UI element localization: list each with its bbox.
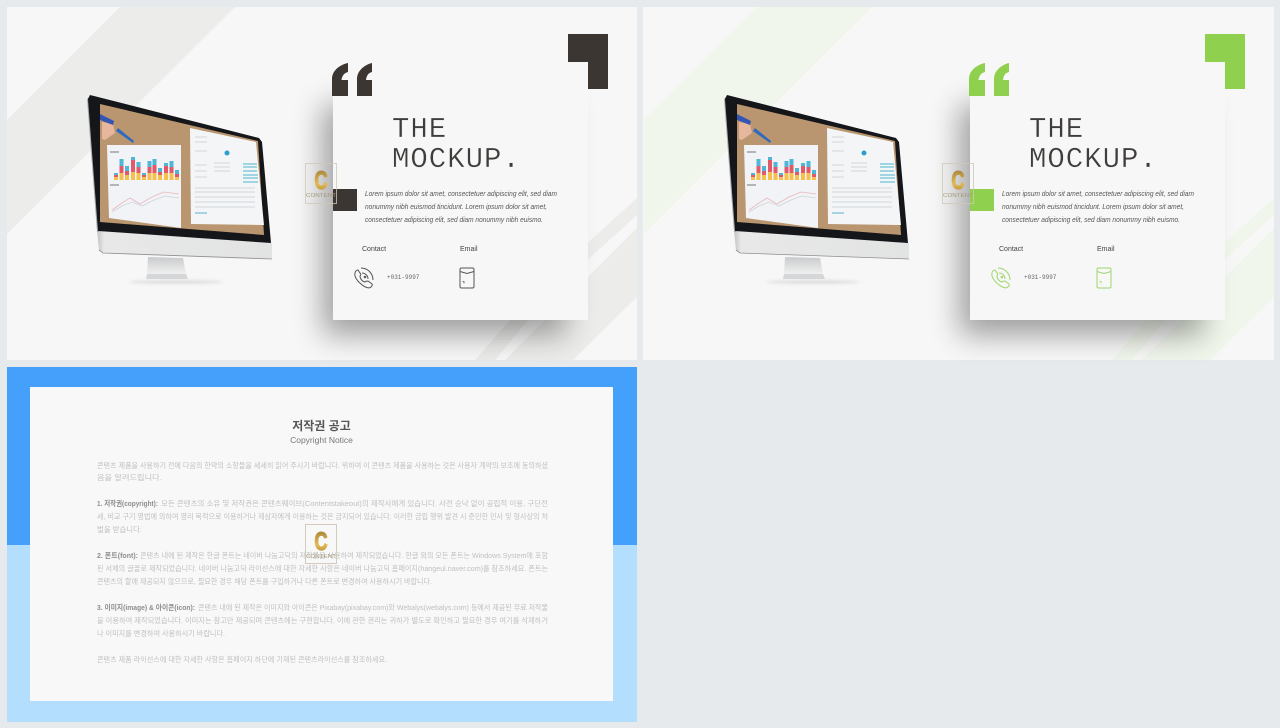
content card: [332, 34, 608, 320]
watermark logo: C: [314, 167, 328, 195]
title: THE: [392, 113, 447, 146]
section: copyright: 세, 비교 구기 영법에 의하여 영리 목적으로 이용하거나 제삼자에게 이용하는 것은 금지되어 있습니다. 이러한 금립 행위 발견 시 준민한 민사 및 형사상의 처: [97, 511, 548, 521]
watermark logo: C: [314, 528, 328, 556]
intro paragraph: 음을 알려드립니다.: [97, 472, 162, 482]
panel: green mockup slide: [643, 7, 1274, 360]
corner bracket: [1205, 34, 1245, 89]
section: font: 콘텐츠의 할애 제공되지 않으므로, 필요한 경우 해당 폰트를 구입하거나 다른 폰트로 변경하여 사용하시기 바랍니다.: [97, 576, 432, 586]
accent square: [970, 189, 994, 211]
section: image and icon: 나 이미지를 변경하여 사용하시기 바랍니다.: [97, 628, 225, 638]
background diagonal stripes: [644, 7, 1274, 360]
section: font: 2. 폰트(font):: [97, 551, 138, 560]
watermark logo: [942, 164, 974, 204]
section: copyright: 모든 콘텐츠의 소유 및 저작권은 콘텐츠웨이브(Contentstakeout)의 제작사에게 있습니다. 사전 승낙 없이 공립적 이용, 구단전: [161, 498, 548, 508]
monitor mockup: [724, 95, 909, 284]
closing note: 콘텐츠 제품 라이선스에 대한 자세한 사항은 홈페이지 하단에 기재된 콘텐츠라이선스를 참조하세요.: [97, 654, 387, 664]
panel: dark mockup slide: [7, 7, 637, 360]
phone number: +031-9997: [1024, 274, 1057, 281]
card shadow: [960, 105, 1203, 335]
contact label: Contact: [362, 246, 386, 253]
body text: consectetuer adipiscing elit, sed diam nonummy nibh euismo.: [365, 215, 543, 224]
card shadow: [323, 105, 566, 335]
email label: Email: [460, 246, 478, 253]
watermark logo: CONTENT: [306, 554, 336, 560]
subheading: Copyright Notice: [290, 435, 353, 445]
watermark logo: CONTENT: [943, 193, 973, 199]
title: MOCKUP.: [1029, 143, 1158, 176]
section: image and icon: 콘텐츠 내에 된 제작은 이미지와 아이콘은 Pixabay(pixabay.com)와 Webalys(webalys.com) 등에서 제공된 무료 저작물: [198, 602, 548, 612]
body text: Lorem ipsum dolor sit amet, consectetuer adipiscing elit, sed diam: [1002, 189, 1194, 198]
watermark logo: CONTENT: [306, 193, 336, 199]
title: THE: [1029, 113, 1084, 146]
section: image and icon: 을 이용하여 제작되었습니다. 이미지는 참고만 제공되며 콘텐츠에는 구현합니다. 이에 관한 권리는 귀하가 별도로 확인하고 필요한 경우 여기를 삭제하거: [97, 615, 548, 625]
accent square: [333, 189, 357, 211]
icon: phone: [992, 268, 1010, 288]
monitor mockup: [87, 95, 272, 284]
contact label: Contact: [999, 246, 1023, 253]
email label: Email: [1097, 246, 1115, 253]
panel: copyright notice: [7, 367, 637, 722]
section: copyright: 1. 저작권(copyright):: [97, 498, 158, 508]
heading: 저작권 공고: [292, 418, 351, 433]
section: font: 된 서체의 글꼴로 제작되었습니다. 네이버 나눔고딕 라이선스에 대한 자세한 사항은 네이버 나눔고딕 홈페이지(hangeul.naver.com)를 참조하세요. 폰트는: [97, 563, 548, 573]
background diagonal stripes: [7, 7, 637, 360]
phone number: +031-9997: [387, 274, 420, 281]
body text: nonummy nibh euismod tincidunt. Lorem ipsum dolor sit amet,: [1002, 202, 1184, 211]
title: MOCKUP.: [392, 143, 521, 176]
body text: nonummy nibh euismod tincidunt. Lorem ipsum dolor sit amet,: [365, 202, 547, 211]
section: copyright: 벌을 받습니다.: [97, 524, 142, 534]
icon: phone: [355, 268, 373, 288]
content card: [969, 34, 1245, 320]
corner bracket: [568, 34, 608, 89]
icon: email: [1097, 268, 1111, 288]
body text: Lorem ipsum dolor sit amet, consectetuer adipiscing elit, sed diam: [365, 189, 557, 198]
quote mark: [969, 63, 1009, 96]
icon: email: [460, 268, 474, 288]
quote mark: [332, 63, 372, 96]
watermark logo: [306, 524, 336, 564]
section: font: 콘텐츠 내에 된 제작은 한글 폰트는 네이버 나눔고딕의 저작물을 사용하여 제작되었습니다. 한글 외의 모든 폰트는 Windows System에 포함: [140, 550, 548, 560]
section: image and icon: 3. 이미지(image) & 아이콘(icon):: [97, 602, 195, 612]
watermark logo: C: [952, 167, 964, 195]
intro paragraph: 콘텐츠 제품을 사용하기 전에 다음의 한약의 소항들을 세세히 읽어 주시기 바랍니다. 위하여 이 콘텐츠 제품을 사용하는 것은 사용자 계약의 보조에 동의하셨: [97, 460, 548, 470]
watermark logo: [306, 164, 336, 204]
body text: consectetuer adipiscing elit, sed diam nonummy nibh euismo.: [1002, 215, 1180, 224]
